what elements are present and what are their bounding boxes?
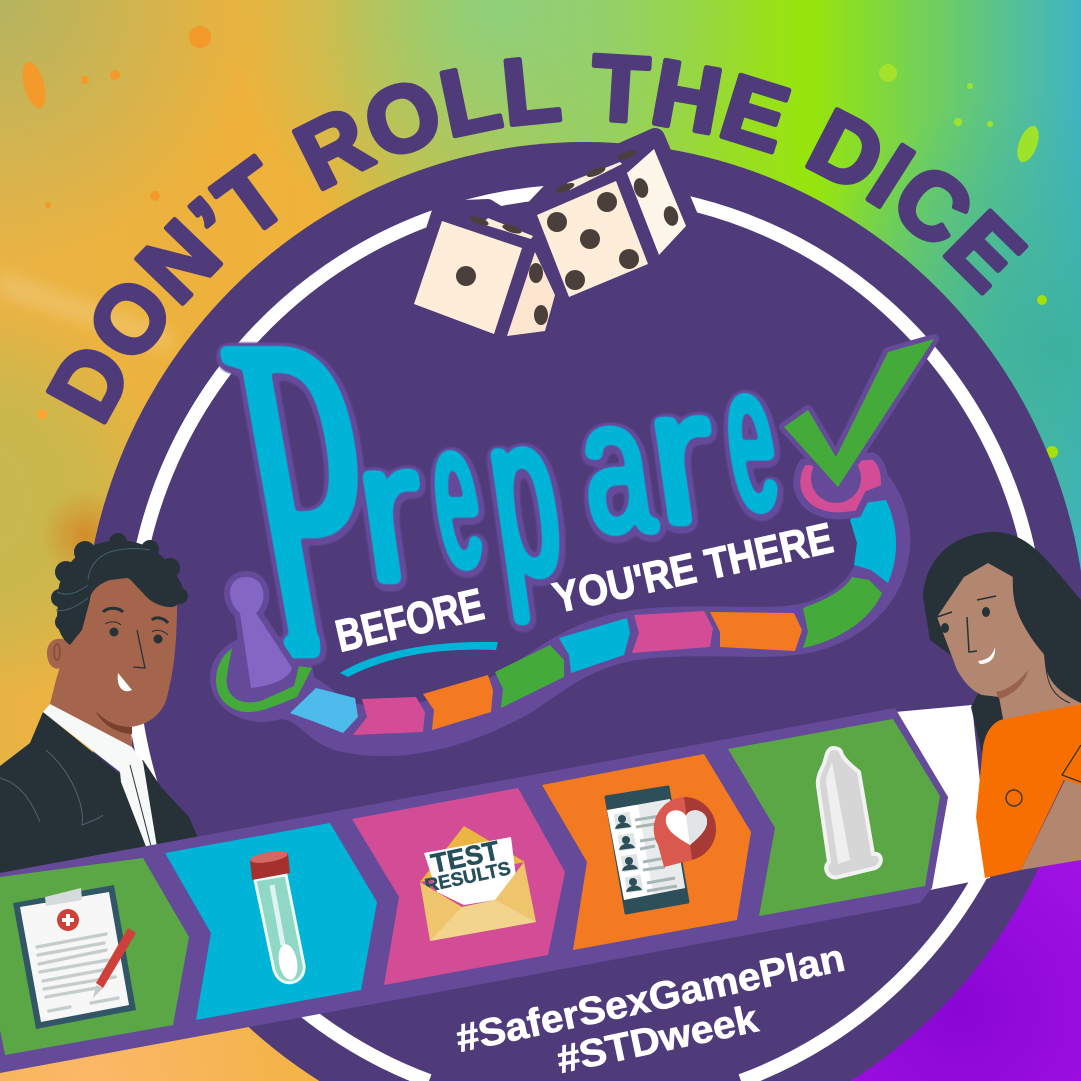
logo word: Prepare: P [197,239,416,757]
step: clipboard [0,858,189,1055]
woman hair [923,532,1081,760]
logo word: Prepare: e [418,376,493,611]
man face [47,570,177,747]
woman eyes and smile [937,596,996,664]
pink ring [797,456,884,516]
man eyes and smile [54,608,168,691]
woman illustration [923,532,1081,878]
man suit [0,712,198,880]
green start ring [216,648,312,712]
logo word: Prepare: a [567,359,663,571]
logo word: Prepare [216,341,784,667]
white ring [131,191,1039,1081]
man hair [51,533,188,645]
logo tagline: you're there: YOU'RE THERE [549,514,837,623]
logo tagline: before: BEFORE [331,578,488,662]
logo word: Prepare: e [711,319,789,554]
step: condom [728,719,940,916]
icon: checkmark [784,339,934,487]
step: test tube [165,823,377,1020]
hashtags: #SaferSexGamePlan [452,937,849,1061]
step: test results envelope [352,788,565,985]
hashtags: #STDweek [553,997,762,1081]
game path band [0,708,948,1073]
woman arm [1021,780,1081,870]
logo word: Prepare: r [633,347,731,565]
step: phone with dating app [542,754,751,950]
woman orange top [976,704,1081,878]
logo: pawn [230,577,292,688]
test results label: TEST [428,835,502,879]
step: test results envelope: RESULTS [423,858,513,897]
logo word: Prepare: r [341,398,440,624]
white strip behind band [895,705,990,890]
man illustration [0,533,198,880]
woman face and neck [937,563,1081,740]
icon: dice [408,138,692,342]
man shirt and collar [43,704,157,857]
tagline underline swoosh [340,642,498,677]
title: DON’T ROLL THE DICE [46,52,1028,424]
logo word: Prepare: p [474,365,574,624]
logo: game trail [210,339,934,735]
